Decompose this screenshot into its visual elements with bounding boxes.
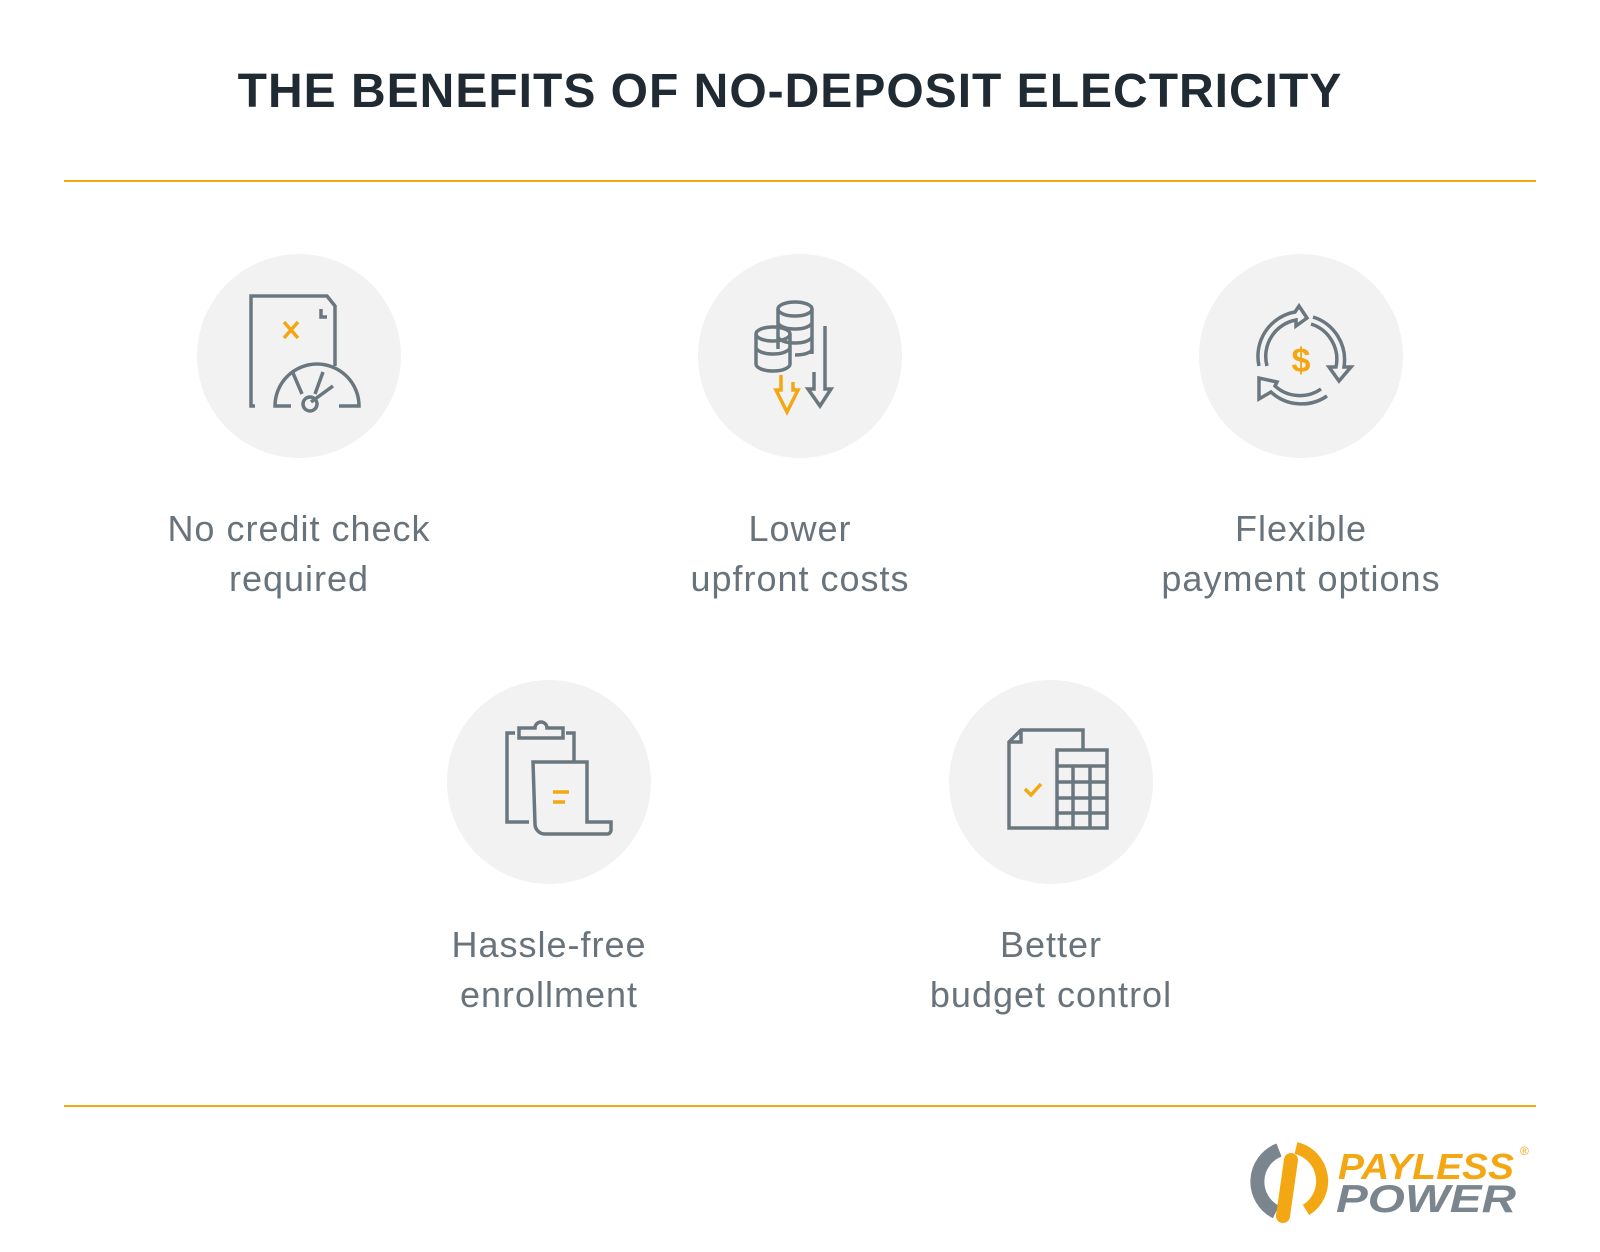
label: budget control: budget control xyxy=(930,974,1172,1015)
label: flexible payment: Flexible xyxy=(1235,508,1367,549)
panel: lower upfront costs xyxy=(698,254,902,458)
label: flexible payment xyxy=(1161,508,1441,599)
logo: ® xyxy=(1520,1144,1529,1158)
logo: PAYLESS xyxy=(1338,1146,1514,1187)
label: flexible payment: payment options xyxy=(1161,558,1441,599)
label: no credit check: required xyxy=(229,558,369,599)
label: budget control xyxy=(930,924,1172,1015)
label: no credit check: No credit check xyxy=(167,508,431,549)
label: hassle-free xyxy=(451,924,647,1015)
label: hassle-free: enrollment xyxy=(460,974,638,1015)
label: lower upfront: upfront costs xyxy=(690,558,910,599)
panel: hassle-free xyxy=(447,680,651,884)
label: lower upfront: Lower xyxy=(748,508,852,549)
logo: POWER xyxy=(1336,1178,1516,1221)
label: hassle-free: Hassle-free xyxy=(451,924,647,965)
title: THE BENEFITS OF NO-DEPOSIT ELECTRICITY xyxy=(238,65,1342,118)
label: budget control: Better xyxy=(1000,924,1102,965)
panel: flexible payment: $ xyxy=(1292,342,1311,380)
panel: flexible payment xyxy=(1199,254,1403,458)
logo xyxy=(1250,1142,1529,1223)
label: no credit check xyxy=(167,508,431,599)
panel: budget control xyxy=(949,680,1153,884)
label: lower upfront xyxy=(690,508,910,599)
panel: no credit check xyxy=(197,254,401,458)
